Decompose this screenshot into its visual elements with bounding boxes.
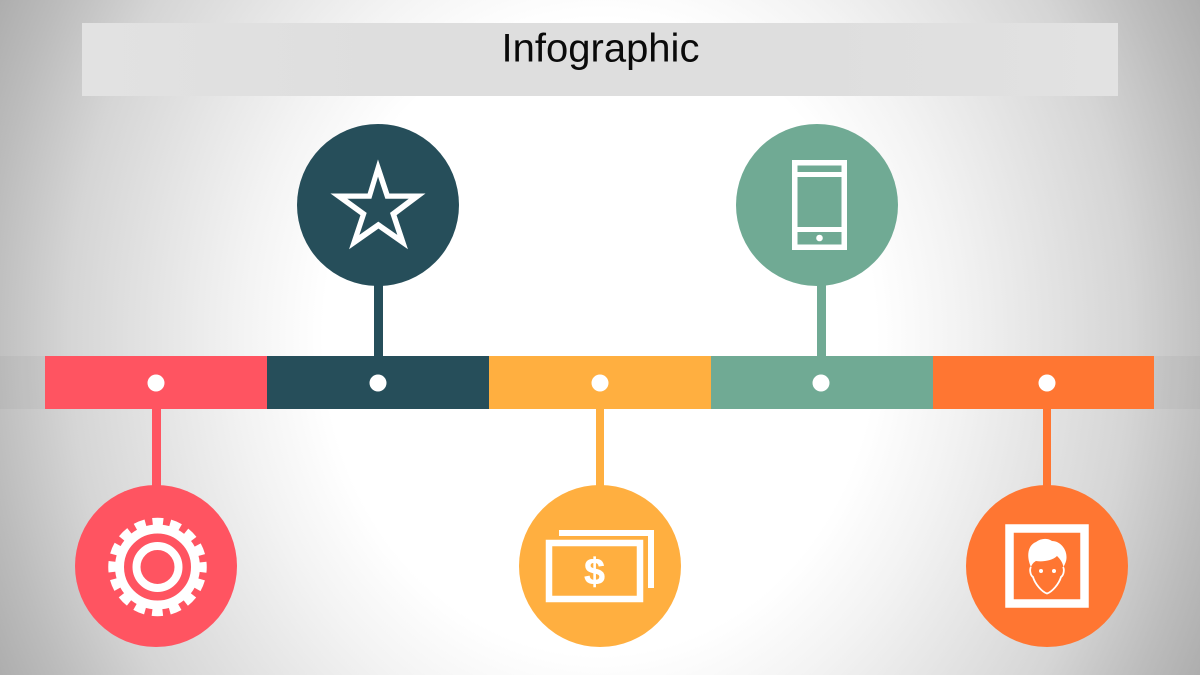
milestone 3: money: [519, 409, 681, 647]
icon: framed portrait: [1010, 528, 1084, 604]
icon: banknotes: [549, 533, 651, 599]
milestone 2: star: [297, 124, 459, 356]
timeline track band: [0, 356, 1200, 409]
milestone 5: portrait: [966, 409, 1128, 647]
segment 3: [489, 356, 711, 409]
segment 1: [45, 356, 267, 409]
title banner: [82, 23, 1118, 96]
segment 5: [933, 356, 1154, 409]
icon: gear: [113, 522, 202, 612]
milestone 4: phone: [736, 124, 898, 356]
segment 2: [267, 356, 489, 409]
icon: banknotes: $: [584, 551, 605, 592]
segment 4: [711, 356, 933, 409]
title: Infographic: [502, 26, 699, 70]
icon: star: [332, 161, 424, 248]
icon: smartphone: [795, 163, 844, 247]
milestone 1: gear: [75, 409, 237, 647]
timeline dots: [148, 374, 1056, 392]
timeline bar: [45, 356, 1154, 409]
